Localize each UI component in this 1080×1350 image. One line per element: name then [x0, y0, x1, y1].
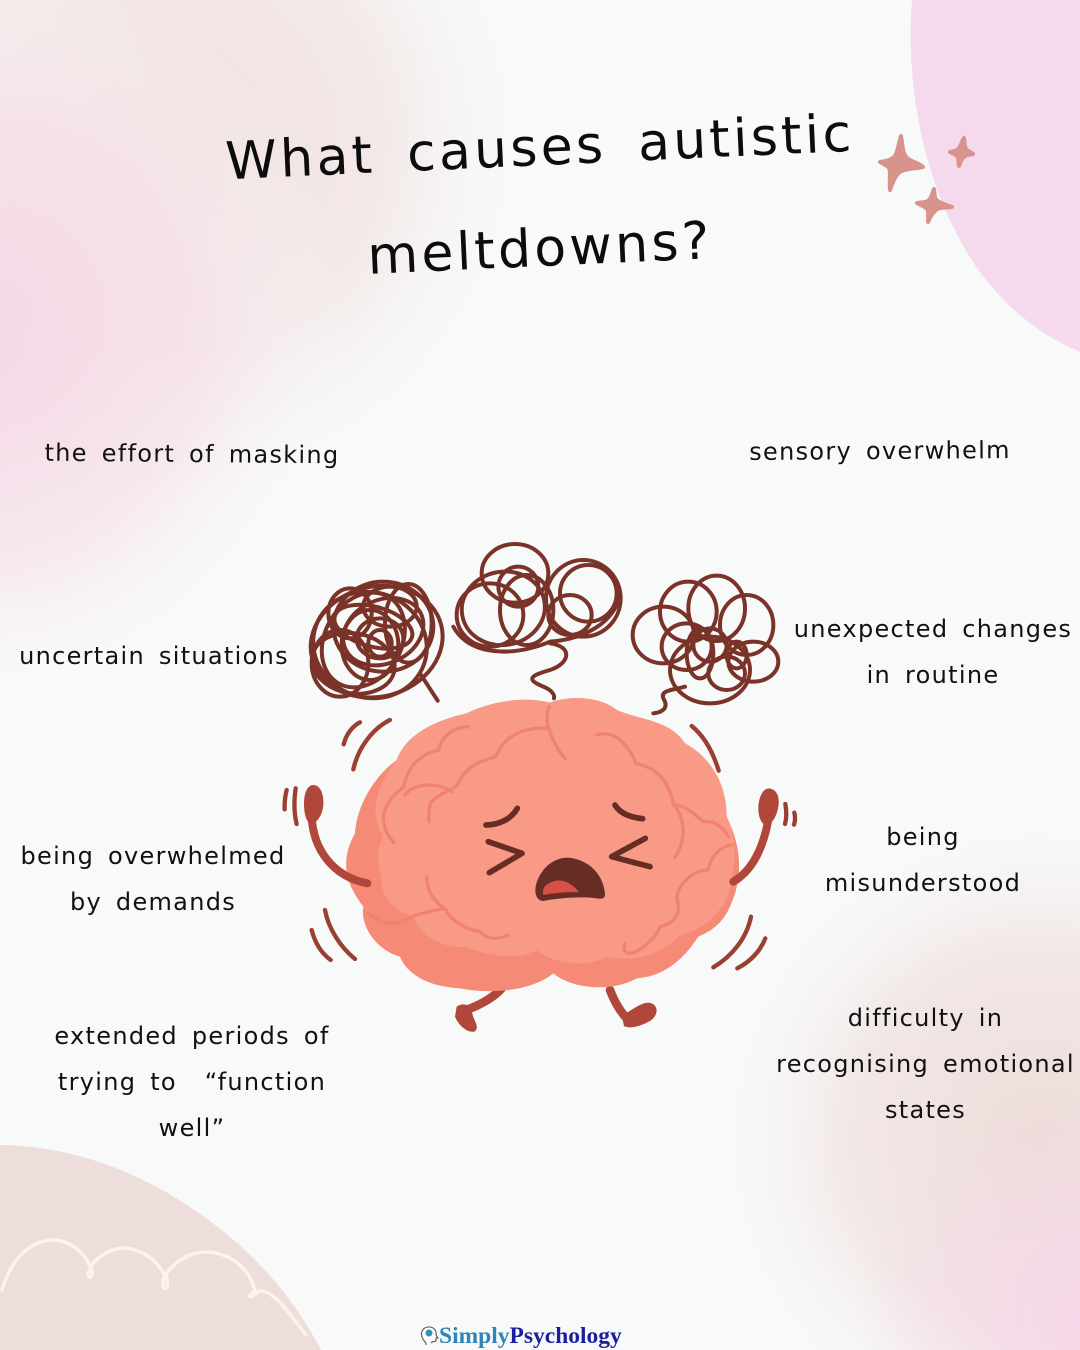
- label: difficulty in recognising emotional states: states: [885, 1096, 966, 1124]
- sparkles: [878, 134, 976, 224]
- label: unexpected changes in routine: unexpected changes: [794, 615, 1072, 643]
- hands: [304, 785, 779, 825]
- title: What causes autistic: [224, 104, 856, 192]
- logo wordmark: SimplyPsychology: [439, 1323, 622, 1349]
- arms: [312, 817, 768, 883]
- label: being overwhelmed by demands: being overwhelmed: [20, 842, 286, 870]
- label: extended periods of trying to function well: extended periods of: [54, 1022, 330, 1050]
- mouth: [535, 858, 605, 901]
- label: difficulty in recognising emotional states: recognising emotional: [776, 1050, 1075, 1078]
- label: difficulty in recognising emotional states: [776, 1004, 1075, 1124]
- logo icon: [420, 1326, 439, 1346]
- label: the effort of masking: the effort of masking: [44, 439, 340, 469]
- label: being overwhelmed by demands: by demands: [70, 888, 236, 916]
- label: unexpected changes in routine: [794, 615, 1072, 689]
- label: being misunderstood: misunderstood: [825, 869, 1021, 897]
- label: extended periods of trying to function well: [54, 1022, 330, 1142]
- label: being misunderstood: [825, 823, 1021, 897]
- label: difficulty in recognising emotional states: difficulty in: [848, 1004, 1003, 1032]
- scribble middle: [453, 544, 621, 698]
- label: extended periods of trying to function well: trying to “function: [58, 1068, 326, 1096]
- label: being overwhelmed by demands: [20, 842, 286, 916]
- brain back: [346, 698, 739, 991]
- brain folds: [368, 707, 732, 953]
- motion lines: [285, 720, 795, 968]
- title second line: meltdowns?: [366, 211, 714, 287]
- label: extended periods of trying to function well: well”: [159, 1114, 225, 1142]
- label: being misunderstood: being: [886, 823, 960, 851]
- label: unexpected changes in routine: in routine: [867, 661, 999, 689]
- corner shape: top right: [911, 0, 1080, 352]
- label: sensory overwhelm: sensory overwhelm: [749, 436, 1011, 466]
- tongue: [543, 881, 579, 895]
- decorative cloud line: [2, 1240, 306, 1335]
- label: uncertain situations: uncertain situations: [19, 642, 289, 670]
- face: [486, 805, 650, 873]
- feet: [455, 1003, 657, 1032]
- scribble right: [633, 576, 778, 713]
- corner shape: bottom left: [0, 1145, 321, 1350]
- brain front: [376, 698, 734, 963]
- legs: [462, 988, 628, 1020]
- scribble left: [298, 571, 455, 714]
- logo: Simply Psychology: [420, 1323, 622, 1349]
